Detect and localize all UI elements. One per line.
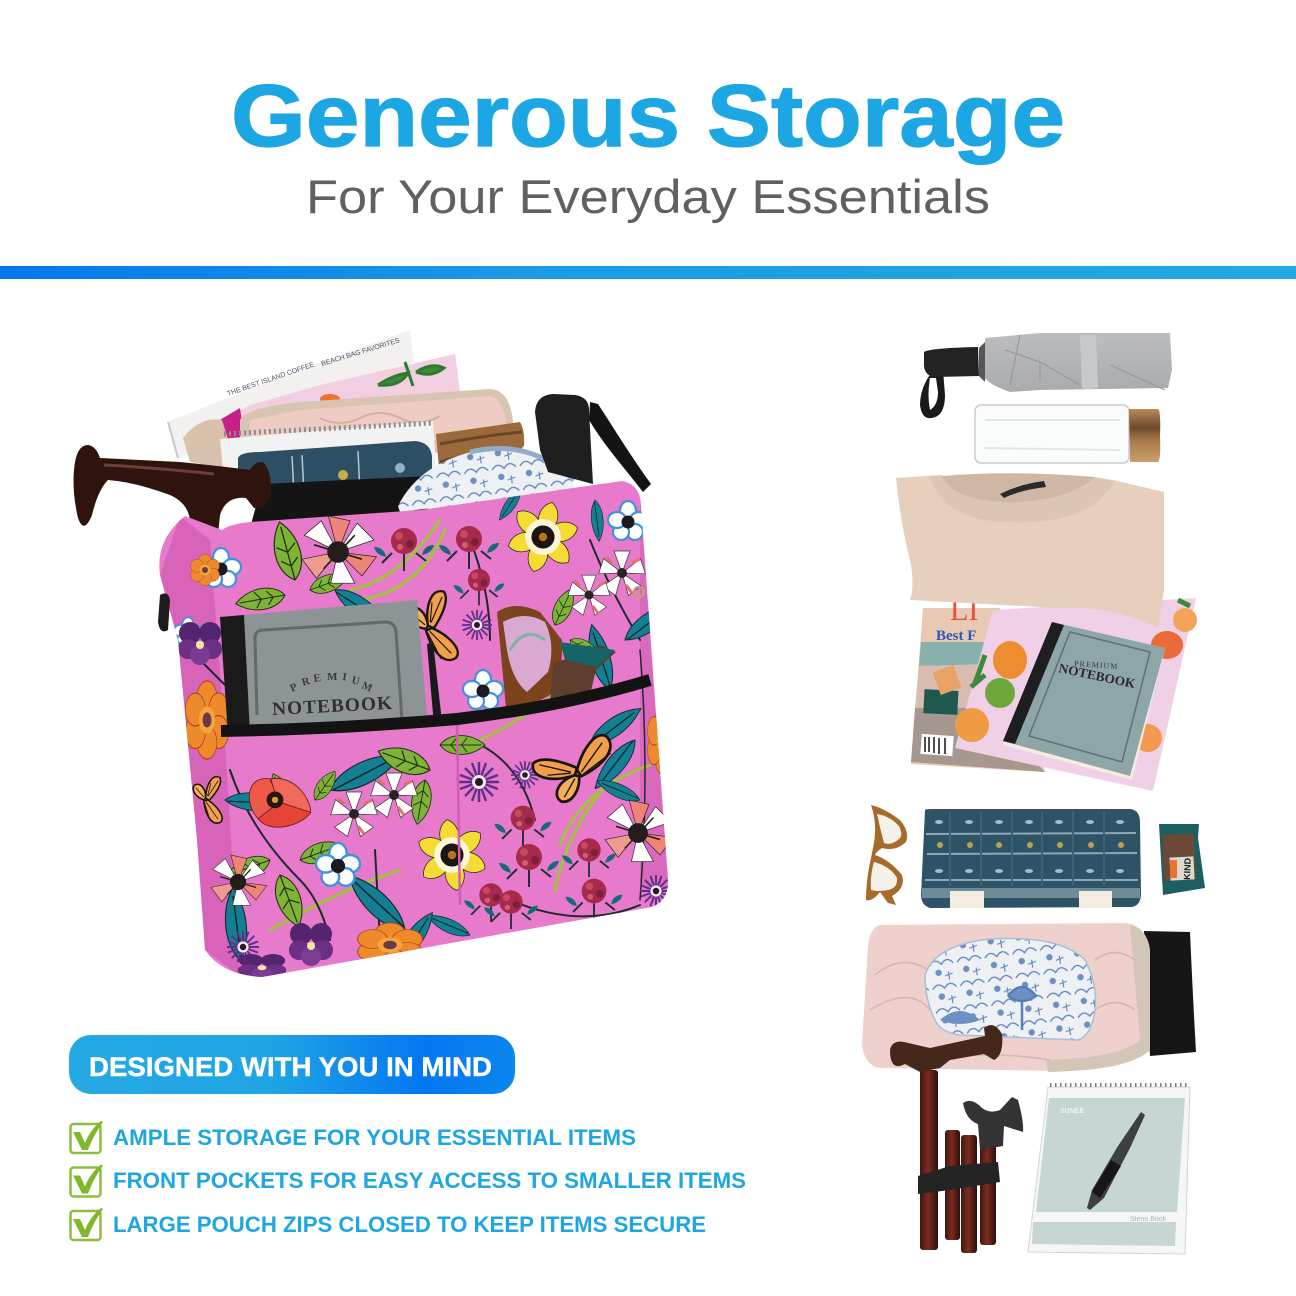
print: peonies [211, 516, 673, 905]
print: pansies [178, 622, 333, 980]
feature 3: LARGE POUCH ZIPS CLOSED TO KEEP ITEMS SECURE [113, 1212, 706, 1237]
feature 1: AMPLE STORAGE FOR YOUR ESSENTIAL ITEMS [113, 1125, 636, 1150]
print: teal leaves [219, 487, 680, 965]
side strap connector and ring [158, 593, 170, 631]
notebook in front pocket [220, 600, 428, 735]
quilted tan pouch [240, 389, 513, 460]
snack bar in pocket [550, 642, 616, 705]
cane in bag: dark glossy handle [74, 445, 271, 552]
item: glass water bottle with wood lid [975, 405, 1160, 463]
print: purple asters [227, 610, 672, 963]
item: quilted pink pouch [862, 923, 1150, 1072]
print: blue flowers [174, 501, 648, 886]
cane rubber base [963, 1097, 1023, 1150]
wooden bottle lid [436, 422, 524, 480]
pen [1087, 1112, 1145, 1210]
item: toile zip pouch [925, 938, 1096, 1040]
print: side gusset shading [160, 516, 240, 976]
pink floral magazine [186, 354, 460, 462]
notebook in front pocket: PREMIUM [288, 671, 375, 695]
item: magazine with beach cover: LI [950, 594, 978, 627]
print: white lilies [331, 551, 645, 837]
spiral notepad [220, 421, 437, 490]
item: weekly pill box [921, 809, 1141, 908]
item: folded beige sweatshirt [896, 473, 1164, 628]
item: steno notepad with pen [1028, 1085, 1190, 1254]
item: magazine with beach cover [911, 594, 1045, 772]
item: folded umbrella [920, 333, 1172, 418]
print: red poppy [249, 778, 311, 827]
blue pill box [238, 441, 432, 496]
item: black tablet [1144, 931, 1196, 1056]
subtitle: For Your Everyday Essentials [306, 170, 990, 223]
callout: designed with you in mind [69, 1035, 515, 1094]
item: premium notebook: NOTEBOOK [1057, 660, 1138, 691]
item: steno notepad with pen: Steno Book [1130, 1216, 1167, 1223]
print: stems and vines [190, 520, 650, 940]
feature 2: FRONT POCKETS FOR EASY ACCESS TO SMALLER ITEMS [113, 1168, 746, 1193]
magazine, white page edge: BEACH BAG FAVORITES [321, 337, 401, 368]
callout: designed with you in mind: DESIGNED WITH YOU IN MIND [89, 1052, 492, 1082]
feature list [70, 1121, 746, 1240]
item: KIND snack bar: KIND [1182, 857, 1193, 880]
notebook in front pocket: NOTEBOOK [272, 693, 394, 720]
print: yellow daffodils [412, 493, 587, 895]
bag contents sticking out of the top [74, 330, 651, 552]
item: premium notebook [1003, 622, 1165, 780]
print: red clover blooms [374, 526, 622, 929]
item: pink floral magazine [955, 598, 1197, 791]
black elastic pocket strap [221, 680, 650, 731]
bag body with floral print [158, 481, 680, 980]
magazine, white page edge [168, 330, 414, 458]
magazine, white page edge: THE BEST ISLAND COFFEE [226, 361, 316, 398]
item: folding cane [890, 1025, 1023, 1253]
print: monarch butterflies [184, 586, 611, 825]
title: Generous Storage [231, 66, 1065, 165]
print: green leaves [224, 519, 604, 931]
black tablet in bag [250, 476, 434, 528]
front pocket centre seam [457, 722, 460, 905]
pen clipped in pocket [427, 642, 442, 726]
print: orange blooms [185, 554, 676, 967]
item: premium notebook: PREMIUM [1074, 659, 1119, 671]
cane handle [890, 1025, 1002, 1072]
item: steno notepad with pen: SUNEE [1060, 1108, 1084, 1115]
tortoise glasses in pocket [497, 606, 562, 708]
illustration: filled floral bag [74, 330, 680, 980]
toile pouch dome [398, 448, 575, 512]
item: tortoise eyeglasses [866, 805, 907, 905]
header divider bar [0, 266, 1296, 279]
item: magazine with beach cover: Best F [936, 628, 976, 644]
cane strap [918, 1162, 1000, 1194]
item: KIND snack bar [1159, 824, 1205, 895]
beige sweater bundle [183, 419, 238, 470]
cane segments [920, 1070, 996, 1253]
black umbrella handle and strap [535, 394, 651, 492]
